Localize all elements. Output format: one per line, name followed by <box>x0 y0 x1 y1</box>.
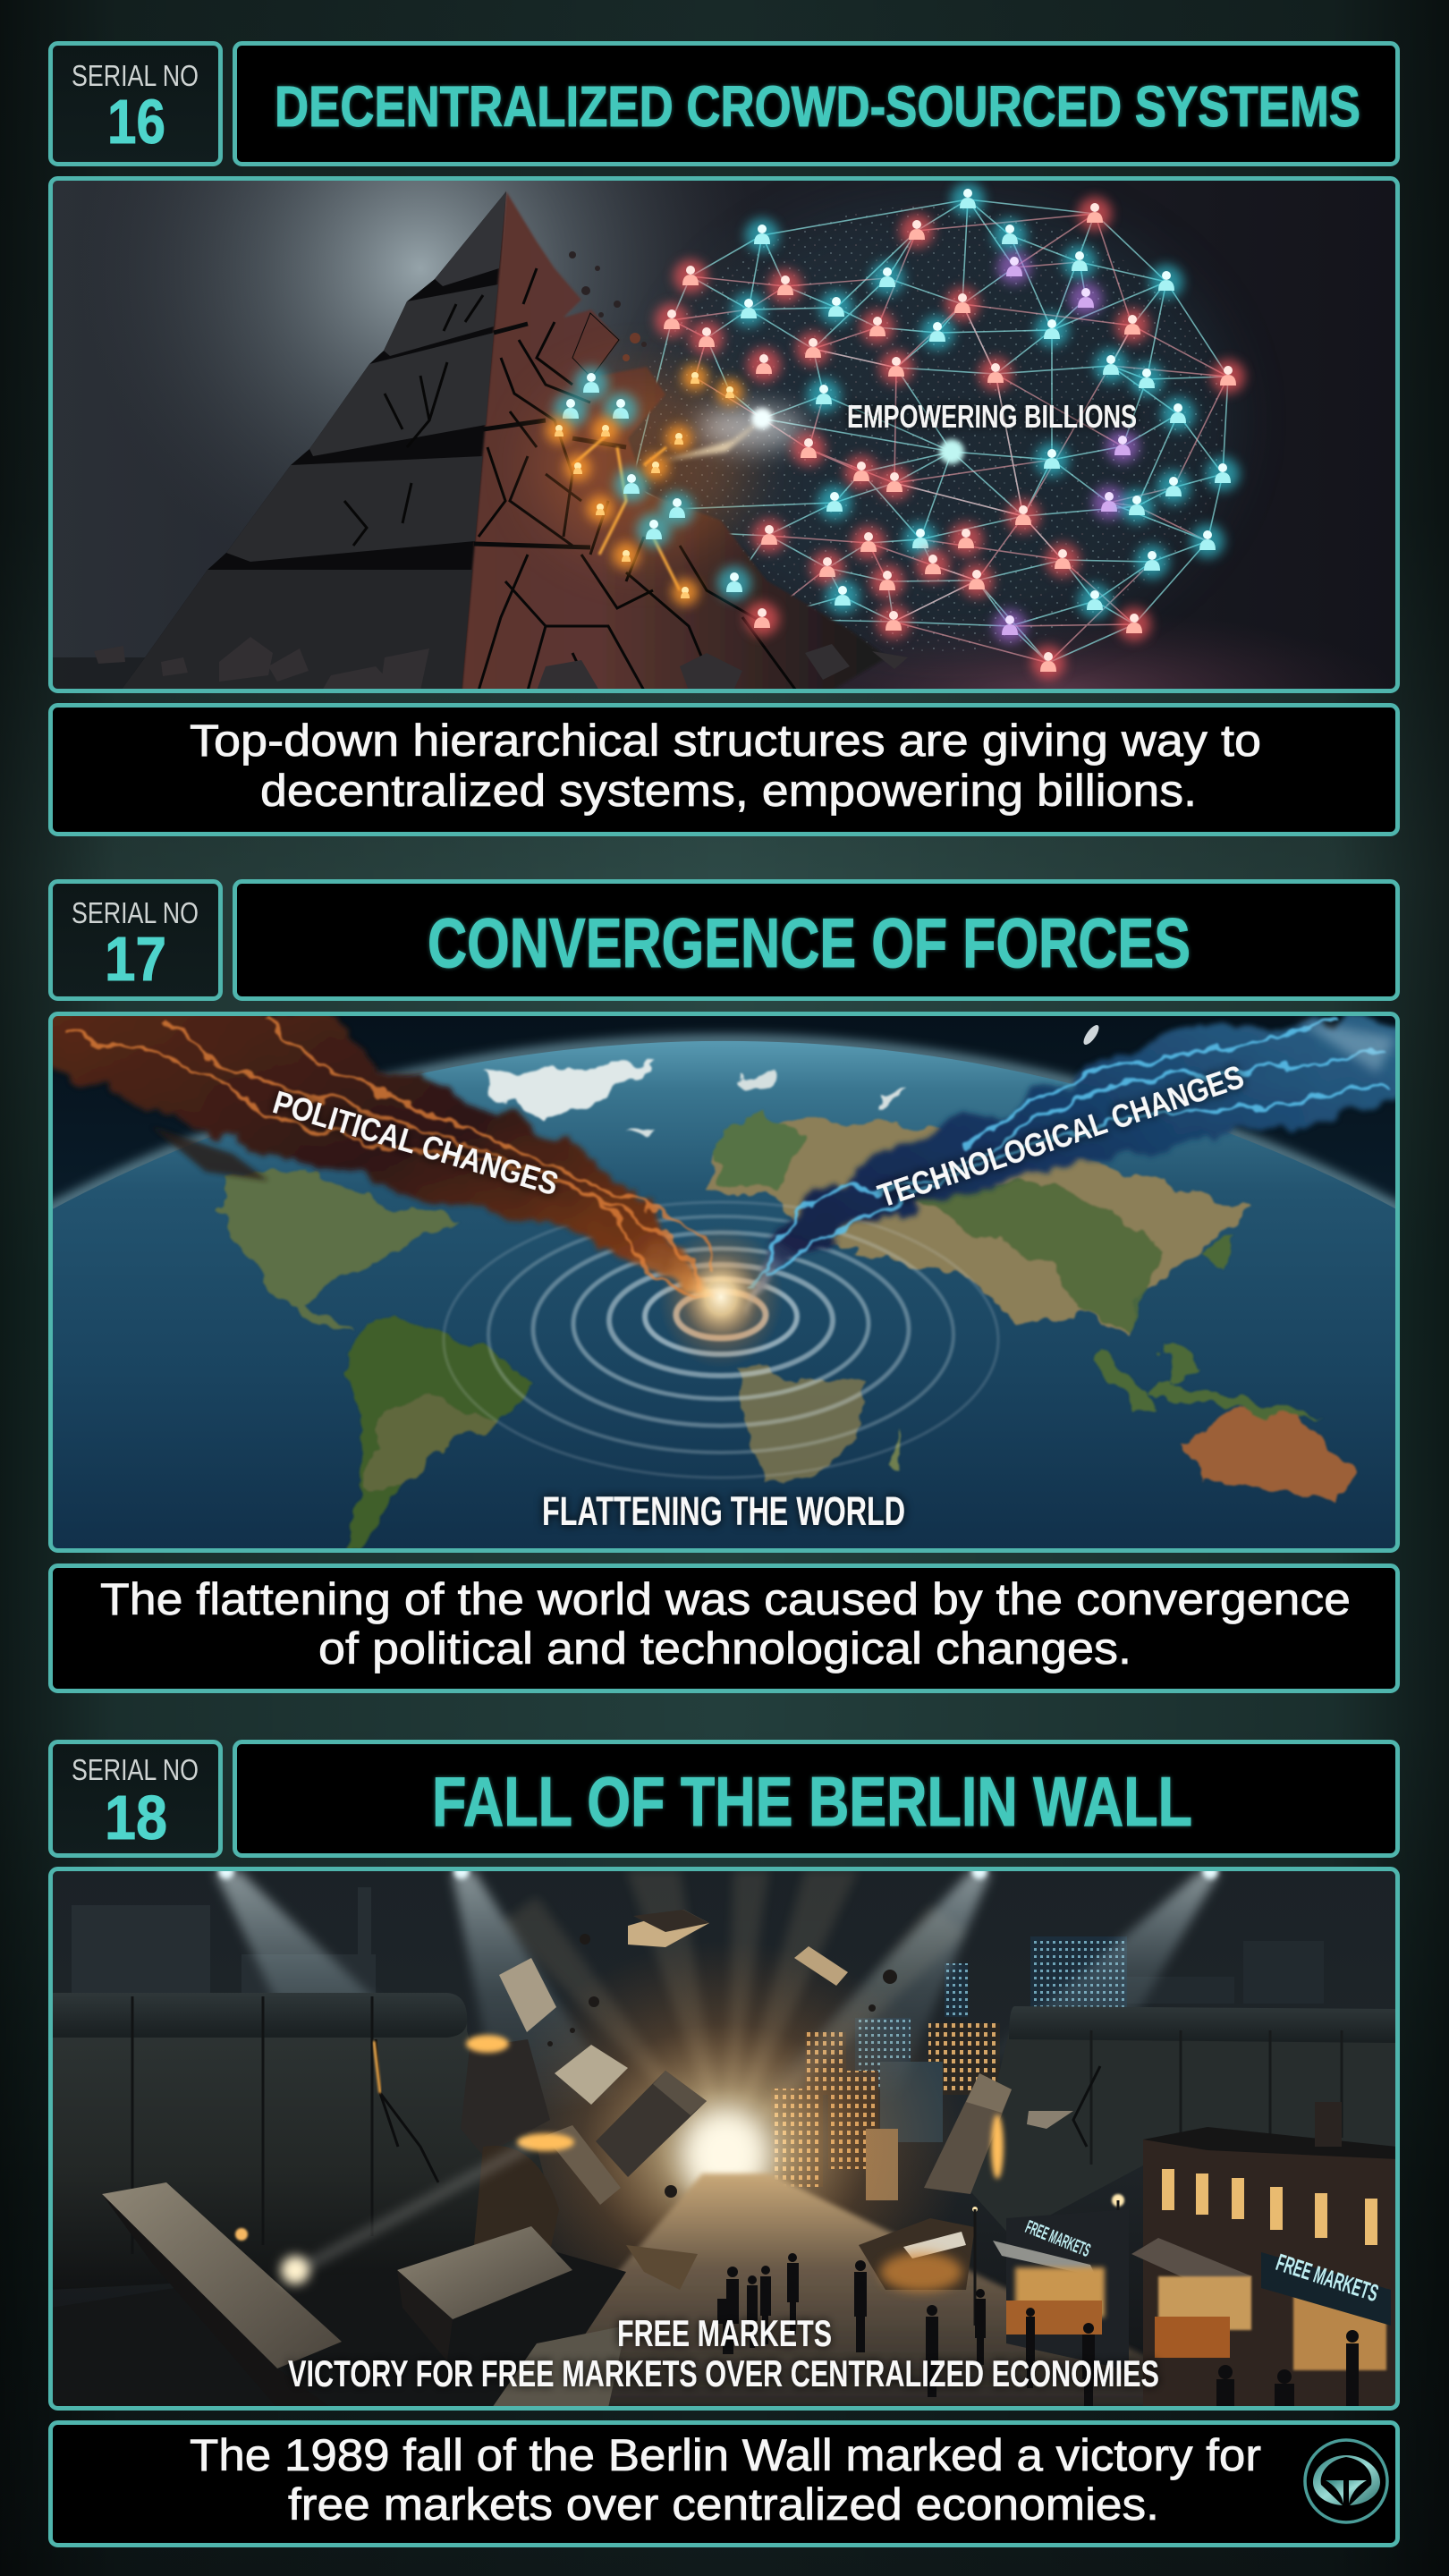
crowd silhouettes <box>717 2253 1359 2408</box>
central blast light <box>484 1869 967 2352</box>
debris and rocks <box>94 251 908 691</box>
label: flattening the world: FLATTENING THE WORLD <box>542 1488 905 1534</box>
label: victory for free markets: VICTORY FOR FREE MARKETS OVER CENTRALIZED ECONOMIES <box>288 2352 1159 2394</box>
flying wall blocks <box>102 1910 1073 2408</box>
stream: technological changes <box>739 1020 1413 1306</box>
caption box 17 <box>50 1565 1397 1690</box>
stream: political changes <box>36 1006 721 1306</box>
land masses <box>222 1064 1353 1550</box>
image panel: flattening world map <box>36 1006 1413 1551</box>
store with free markets sign <box>993 2209 1129 2370</box>
caption box 17: The flattening of the world was caused by the convergence <box>100 1574 1351 1624</box>
label: technological changes: TECHNOLOGICAL CHANGES <box>874 1058 1248 1215</box>
icon: circular logo <box>1305 2440 1387 2522</box>
section 17 <box>36 882 1413 1690</box>
convergence glow <box>658 1225 784 1368</box>
pyramid <box>121 191 887 691</box>
title box 16 <box>234 43 1397 165</box>
title box 17 <box>234 882 1397 998</box>
network connection lines <box>571 199 1228 663</box>
label: empowering billions: EMPOWERING BILLIONS <box>847 398 1137 435</box>
serial box 16: SERIAL NO <box>72 59 199 92</box>
right building <box>1131 2102 1397 2408</box>
explosion glow <box>537 376 805 590</box>
caption box 16 <box>50 705 1397 834</box>
serial box 17: 17 <box>105 924 166 994</box>
left wall section <box>51 1993 555 2290</box>
label: political changes: POLITICAL CHANGES <box>269 1083 563 1202</box>
serial box 18: SERIAL NO <box>72 1753 199 1786</box>
caption box 16: decentralized systems, empowering billions. <box>260 766 1197 816</box>
network speckle dust <box>635 206 1225 653</box>
road with lit market street <box>501 2174 1252 2408</box>
globe <box>36 1041 1413 1550</box>
store with free markets sign: FREE MARKETS <box>1022 2216 1093 2261</box>
market stalls and street lamps <box>235 2194 1124 2334</box>
section 16 <box>50 0 1397 834</box>
title box 17: CONVERGENCE OF FORCES <box>428 903 1191 982</box>
title box 18: FALL OF THE BERLIN WALL <box>432 1762 1192 1841</box>
network people nodes <box>546 182 1245 680</box>
image frame 18 <box>50 1869 1397 2408</box>
serial box 16 <box>50 43 220 165</box>
caption box 18: free markets over centralized economies. <box>288 2479 1159 2529</box>
spotlights <box>215 1871 1220 2138</box>
right wall section <box>970 2006 1397 2236</box>
serial box 18: 18 <box>105 1783 167 1852</box>
distant skyline <box>72 1887 1324 2200</box>
caption box 18: The 1989 fall of the Berlin Wall marked a victory for <box>190 2430 1261 2480</box>
image panel: pyramid breaking into a network <box>48 176 1400 693</box>
serial box 18 <box>50 1742 220 1855</box>
serial box 17 <box>50 882 220 998</box>
serial box 16: 16 <box>107 87 165 157</box>
image panel: Berlin Wall breaking open <box>50 1863 1397 2408</box>
label: free markets: FREE MARKETS <box>617 2312 832 2354</box>
serial box 17: SERIAL NO <box>72 896 199 929</box>
caption box 16: Top-down hierarchical structures are giving way to <box>190 716 1261 766</box>
caption box 18 <box>50 2422 1397 2546</box>
image frame 17 <box>50 1014 1397 1551</box>
title box 18 <box>234 1742 1397 1855</box>
image frame 16 <box>50 179 1397 691</box>
ripples <box>444 1202 998 1478</box>
section 18 <box>50 1742 1397 2546</box>
caption box 17: of political and technological changes. <box>318 1623 1131 1674</box>
